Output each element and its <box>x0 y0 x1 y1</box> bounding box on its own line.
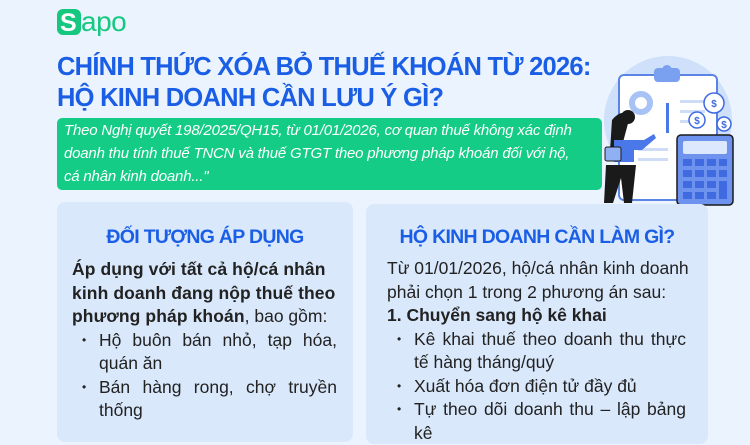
heading: cần làm gì: HỘ KINH DOANH CẦN LÀM GÌ? <box>400 226 674 248</box>
text block: options: Kê khai thuế theo doanh thu thực tế hàng tháng/quý <box>414 328 686 372</box>
title <box>57 52 591 112</box>
text block: applicable subjects <box>72 259 337 420</box>
title: HỘ KINH DOANH CẦN LƯU Ý GÌ? <box>57 84 443 112</box>
text block: applicable subjects: Áp dụng với tất cả hộ/cá nhân kinh doanh đang nộp thuế theo phương pháp khoán, bao gồm: <box>72 259 335 326</box>
illustration: accountant with clipboard and calculator: $ <box>711 99 717 110</box>
callout: quote <box>57 118 602 190</box>
text block: options: Tự theo dõi doanh thu – lập bảng kê <box>414 399 686 442</box>
illustration: accountant with clipboard and calculator: $ <box>721 120 727 131</box>
logo <box>57 6 126 36</box>
text block: options <box>387 258 689 442</box>
text block: applicable subjects: Hộ buôn bán nhỏ, tạp hóa, quán ăn <box>99 330 337 373</box>
panel: đối tượng áp dụng <box>57 202 353 442</box>
callout: quote: Theo Nghị quyết 198/2025/QH15, từ 01/01/2026, cơ quan thuế không xác định <box>64 122 572 139</box>
text block: options: 1. Chuyển sang hộ kê khai <box>387 305 607 325</box>
text block: options: Xuất hóa đơn điện tử đầy đủ <box>414 376 637 396</box>
title: CHÍNH THỨC XÓA BỎ THUẾ KHOÁN TỪ 2026: <box>57 53 591 81</box>
illustration: accountant with clipboard and calculator: $ <box>694 116 700 127</box>
illustration: accountant with clipboard and calculator <box>604 56 734 206</box>
text block: options: Từ 01/01/2026, hộ/cá nhân kinh doanh phải chọn 1 trong 2 phương án sau: <box>387 258 689 302</box>
callout: quote: cá nhân kinh doanh..." <box>64 168 208 185</box>
panel: hộ kinh doanh cần làm gì <box>366 204 708 444</box>
heading: đối tượng áp dụng: ĐỐI TƯỢNG ÁP DỤNG <box>106 226 304 248</box>
text block: applicable subjects: Bán hàng rong, chợ truyền thống <box>99 376 337 420</box>
callout: quote: doanh thu tính thuế TNCN và thuế GTGT theo phương pháp khoán đối với hộ, <box>64 145 569 162</box>
